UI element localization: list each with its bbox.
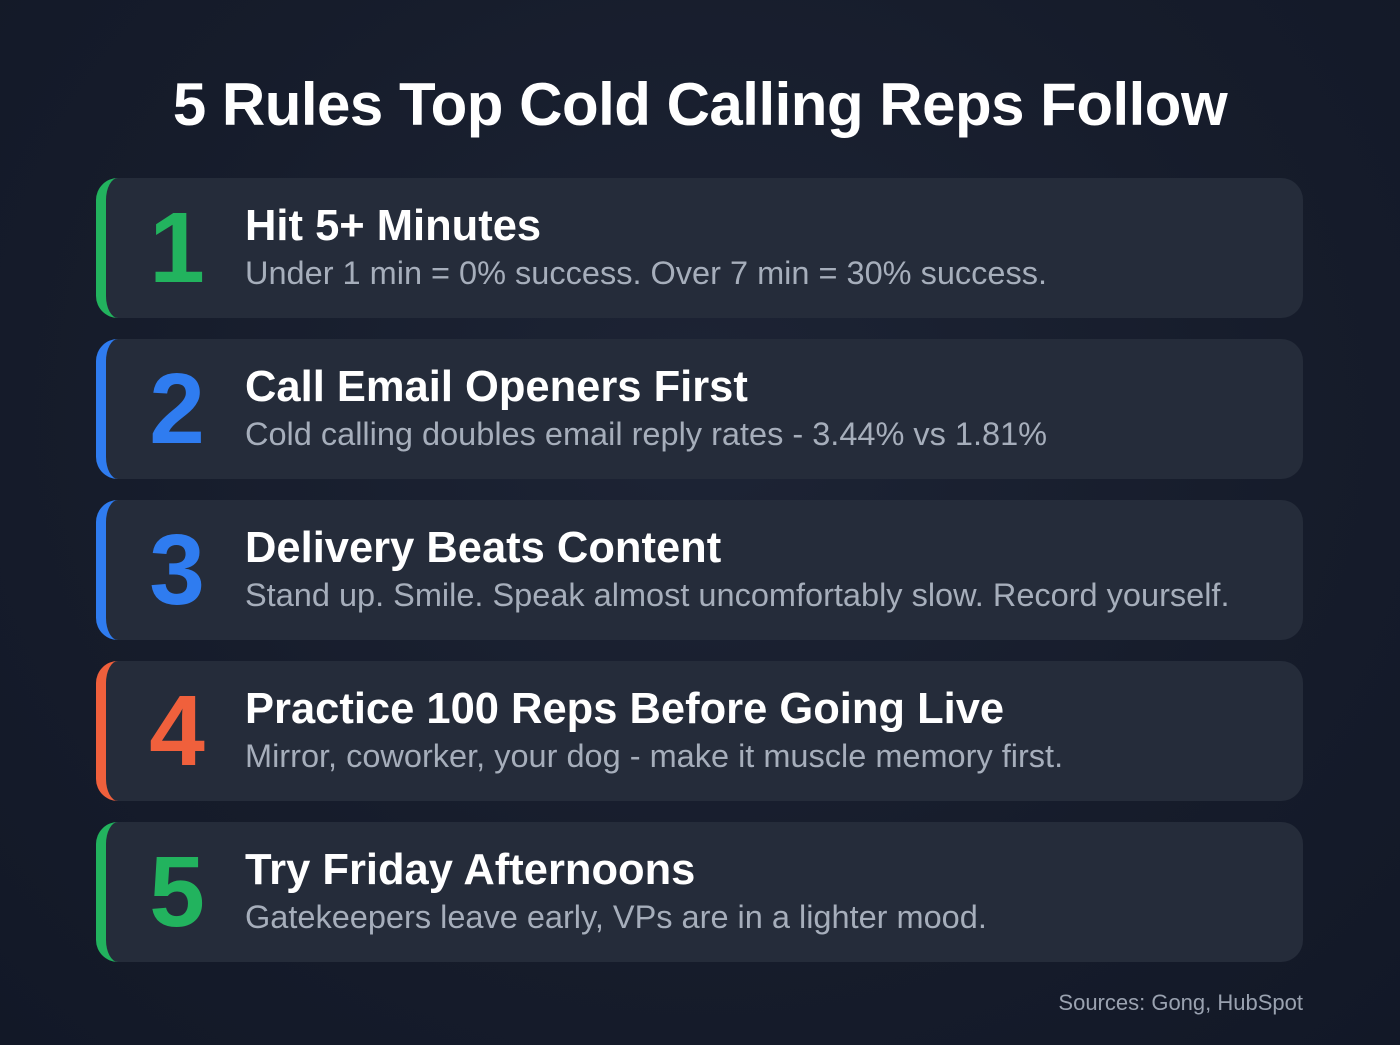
- card 5: Try Friday Afternoons: [245, 846, 695, 894]
- card 4: 4: [149, 675, 205, 787]
- card 3: Stand up. Smile. Speak almost uncomfortably slow. Record yourself.: [245, 577, 1230, 613]
- card 3: 3: [149, 514, 205, 626]
- card 1: [96, 178, 1303, 318]
- card 3: [96, 500, 1303, 640]
- card 1: Under 1 min = 0% success. Over 7 min = 30% success.: [245, 255, 1047, 291]
- card 2: 2: [149, 353, 205, 465]
- card 2: Call Email Openers First: [245, 363, 748, 411]
- card 4: [96, 661, 1303, 801]
- card 4: Practice 100 Reps Before Going Live: [245, 685, 1004, 733]
- card 1: 1: [149, 192, 205, 304]
- card 1: Hit 5+ Minutes: [245, 202, 541, 250]
- title: 5 Rules Top Cold Calling Reps Follow: [173, 71, 1227, 138]
- sources: Sources: Gong, HubSpot: [1058, 990, 1303, 1015]
- card 5: [96, 822, 1303, 962]
- card 5: Gatekeepers leave early, VPs are in a lighter mood.: [245, 899, 987, 935]
- card 2: [96, 339, 1303, 479]
- card 5: 5: [149, 836, 205, 948]
- card 4: Mirror, coworker, your dog - make it muscle memory first.: [245, 738, 1063, 774]
- card 3: Delivery Beats Content: [245, 524, 721, 572]
- card 2: Cold calling doubles email reply rates - 3.44% vs 1.81%: [245, 416, 1047, 452]
